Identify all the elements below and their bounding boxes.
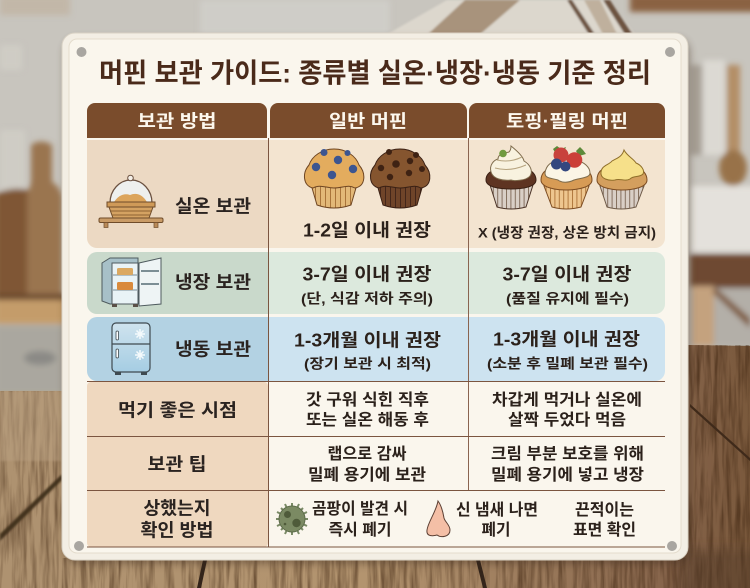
table header: 토핑·필링 머핀 (506, 112, 628, 132)
icon: chocolate chip muffin (370, 149, 430, 208)
text: surface check (573, 501, 636, 539)
label: how to check spoilage (140, 498, 214, 540)
text: regular muffin best time (306, 391, 429, 429)
table header: 보관 방법 (138, 112, 216, 132)
text: regular muffin frozen: (장기 보관 시 최적) (304, 356, 431, 372)
text: mold check: 즉시 폐기 (328, 521, 392, 539)
text: topped muffin room temperature: X (냉장 권장, 상온 방치 금지) (478, 224, 656, 240)
text: topped muffin refrigerated: (품질 유지에 필수) (506, 290, 629, 306)
label: storage tips: 보관 팁 (148, 454, 206, 474)
text: topped muffin best time: 차갑게 먹거나 실온에 (492, 391, 642, 409)
row: frozen (112, 323, 648, 375)
text: regular muffin tips: 밀폐 용기에 보관 (308, 466, 426, 484)
display board (62, 33, 688, 560)
icon: mold spore (276, 503, 308, 535)
corner bolts (74, 47, 677, 551)
text: smell check: 신 냄새 나면 (456, 501, 538, 519)
icon: freezer (112, 323, 150, 375)
label: how to check spoilage: 확인 방법 (140, 520, 214, 540)
text: regular muffin frozen: 1-3개월 이내 권장 (294, 330, 441, 350)
text: smell check (456, 501, 538, 539)
label: frozen storage: 냉동 보관 (175, 340, 251, 360)
text: regular muffin tips: 랩으로 감싸 (328, 445, 407, 463)
label: refrigerated storage: 냉장 보관 (175, 272, 251, 292)
icon: cream topped cupcake (486, 146, 536, 209)
text: topped muffin frozen: 1-3개월 이내 권장 (493, 330, 640, 350)
text: surface check: 끈적이는 (575, 501, 634, 519)
table grid lines (87, 138, 665, 547)
text: regular muffin room temperature: 1-2일 이내 권장 (303, 220, 431, 240)
text: regular muffin best time: 또는 실온 해동 후 (306, 411, 429, 429)
text: topped muffin tips (491, 445, 644, 484)
icon: nose (427, 501, 450, 537)
row: best time to eat (118, 391, 642, 429)
text: mold check (312, 500, 408, 539)
towel draped behind the board (384, 0, 636, 36)
label: how to check spoilage: 상했는지 (144, 498, 210, 518)
text: mold check: 곰팡이 발견 시 (312, 500, 408, 518)
title: 머핀 보관 가이드: 종류별 실온·냉장·냉동 기준 정리 (99, 58, 651, 88)
text: topped muffin frozen (487, 330, 648, 372)
table header (87, 103, 665, 138)
icon: basket under cloche (99, 175, 163, 228)
text: topped muffin frozen: (소분 후 밀폐 보관 필수) (487, 356, 648, 372)
text: smell check: 폐기 (482, 521, 510, 539)
text: regular muffin refrigerated: 3-7일 이내 권장 (302, 264, 432, 284)
text: topped muffin best time (492, 391, 642, 429)
text: regular muffin best time: 갓 구워 식힌 직후 (306, 391, 429, 409)
text: regular muffin tips (308, 445, 426, 484)
text: regular muffin refrigerated: (단, 식감 저하 주의) (301, 290, 433, 306)
icon: berry topped cupcake (541, 146, 592, 209)
text: topped muffin best time: 살짝 두었다 먹음 (508, 411, 626, 429)
icon: open refrigerator (102, 258, 161, 307)
text: topped muffin tips: 밀폐 용기에 넣고 냉장 (491, 466, 644, 484)
row: room temperature (99, 146, 656, 240)
text: topped muffin refrigerated (502, 264, 632, 306)
table row backgrounds (87, 140, 665, 547)
row: storage tips (148, 445, 644, 484)
table header: 일반 머핀 (329, 112, 407, 132)
row: how to check spoilage (140, 498, 636, 540)
board shadow (64, 38, 690, 564)
label: room temperature storage: 실온 보관 (175, 196, 251, 216)
text: topped muffin tips: 크림 부분 보호를 위해 (491, 445, 644, 463)
text: regular muffin refrigerated (301, 264, 433, 306)
icon: custard filled cupcake (597, 150, 647, 209)
icon: blueberry muffin (304, 149, 364, 208)
label: best time to eat: 먹기 좋은 시점 (118, 400, 237, 420)
text: regular muffin frozen (294, 330, 441, 372)
text: surface check: 표면 확인 (573, 521, 636, 539)
text: topped muffin refrigerated: 3-7일 이내 권장 (502, 264, 632, 284)
row: refrigerated (102, 258, 632, 307)
